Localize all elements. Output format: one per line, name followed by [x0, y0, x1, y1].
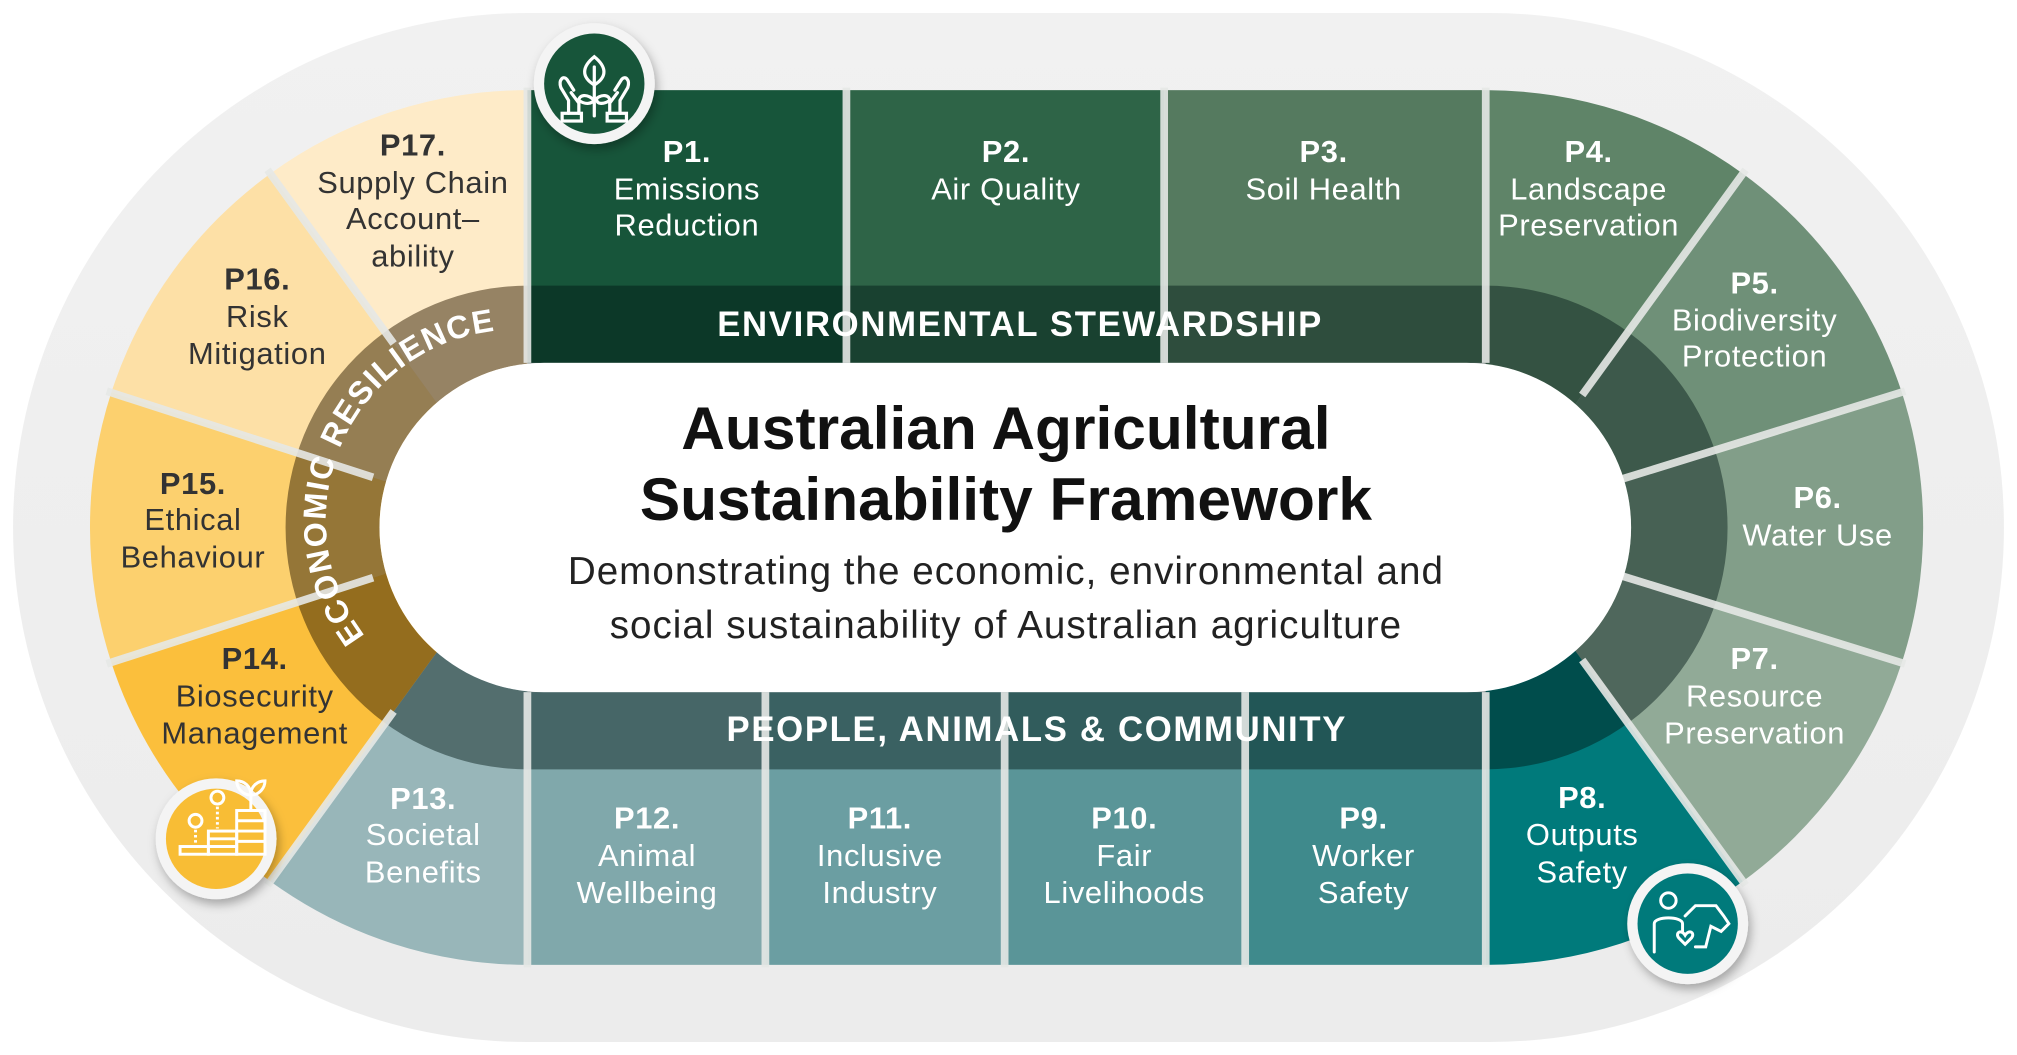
segment P8 — [1486, 528, 1743, 965]
segment P11 — [765, 692, 1005, 965]
segment labels: Fair — [1096, 838, 1152, 873]
segment labels: P6. — [1793, 480, 1842, 515]
segment labels: Management — [161, 716, 348, 751]
segment labels: Preservation — [1664, 716, 1845, 751]
segment P15 — [90, 392, 527, 663]
icon: person with cow — [1627, 863, 1748, 984]
title — [640, 394, 1372, 533]
segment labels: P4. — [1565, 134, 1613, 169]
segment labels: ability — [371, 238, 455, 273]
segment labels: P5. — [1730, 265, 1779, 300]
band label: economic resilience: ECONOMIC RESILIENCE — [303, 309, 494, 647]
segment labels: P7. — [1730, 641, 1779, 676]
subtitle: Demonstrating the economic, environmental and — [568, 550, 1444, 593]
segment labels: Outputs — [1526, 817, 1639, 852]
segment P7 — [1486, 528, 1902, 881]
segment labels: Safety — [1537, 855, 1628, 890]
segments group — [90, 90, 1923, 965]
segment labels: P3. — [1300, 134, 1348, 169]
icon: coins with plant — [156, 778, 277, 899]
segment labels: P10. — [1091, 801, 1157, 836]
segment labels: Biodiversity — [1672, 303, 1837, 338]
title: Australian Agricultural — [681, 394, 1331, 462]
segment labels: Protection — [1682, 339, 1827, 374]
segment labels: P2. — [982, 134, 1030, 169]
segment labels: Preservation — [1498, 207, 1679, 242]
segment labels: P9. — [1339, 801, 1388, 836]
segment labels: P14. — [222, 641, 288, 676]
segment labels: Benefits — [365, 855, 482, 890]
segment P10 — [1005, 692, 1245, 965]
segment P16 — [111, 174, 527, 528]
title: Sustainability Framework — [640, 465, 1372, 533]
centre white stadium — [379, 363, 1631, 692]
segment labels: Resource — [1686, 678, 1823, 713]
band ring overlay — [286, 286, 1728, 769]
segment labels: Industry — [822, 875, 937, 910]
segment labels: Risk — [226, 299, 289, 334]
segment P14 — [111, 528, 527, 881]
segment P17 — [270, 90, 527, 527]
segment labels: Inclusive — [817, 838, 943, 873]
segment labels: P1. — [663, 134, 711, 169]
subtitle: social sustainability of Australian agriculture — [610, 604, 1402, 647]
segment labels: Livelihoods — [1044, 875, 1205, 910]
segment labels: Air Quality — [931, 171, 1081, 206]
segment P4 — [1486, 90, 1743, 527]
segment labels: P16. — [224, 262, 290, 297]
segment labels — [121, 128, 1893, 910]
segment labels: Water Use — [1742, 518, 1893, 553]
segment labels: Behaviour — [121, 539, 265, 574]
segment P2 — [846, 90, 1164, 363]
segment P3 — [1164, 90, 1486, 363]
segment labels: P17. — [380, 128, 446, 163]
segment labels: Account– — [346, 201, 480, 236]
segment labels: Societal — [366, 817, 481, 852]
segment labels: Landscape — [1510, 171, 1667, 206]
band label: people animals community: PEOPLE, ANIMALS & COMMUNITY — [727, 711, 1347, 749]
segment P12 — [527, 692, 765, 965]
segment labels: P11. — [848, 801, 912, 836]
segment P9 — [1245, 692, 1486, 965]
segment labels: Mitigation — [188, 336, 327, 371]
band label: environmental stewardship: ENVIRONMENTAL STEWARDSHIP — [717, 306, 1323, 344]
segment labels: Emissions — [614, 171, 760, 206]
segment P6 — [1486, 392, 1923, 663]
icon: hands with plant — [534, 23, 655, 144]
segment labels: Worker — [1312, 838, 1415, 873]
segment labels: Wellbeing — [577, 875, 717, 910]
segment labels: Supply Chain — [317, 165, 509, 200]
segment labels: Biosecurity — [176, 678, 334, 713]
segment labels: Soil Health — [1245, 171, 1402, 206]
segment P5 — [1486, 174, 1902, 528]
segment labels: P12. — [614, 801, 680, 836]
segment labels: P15. — [160, 466, 226, 501]
segment labels: Ethical — [144, 502, 242, 537]
segment P1 — [527, 90, 846, 363]
segment labels: Safety — [1318, 875, 1409, 910]
segment labels: P8. — [1558, 780, 1606, 815]
segment P13 — [270, 528, 527, 965]
segment labels: Animal — [598, 838, 696, 873]
subtitle — [568, 550, 1444, 647]
segment labels: Reduction — [615, 207, 759, 242]
segment labels: P13. — [390, 781, 456, 816]
